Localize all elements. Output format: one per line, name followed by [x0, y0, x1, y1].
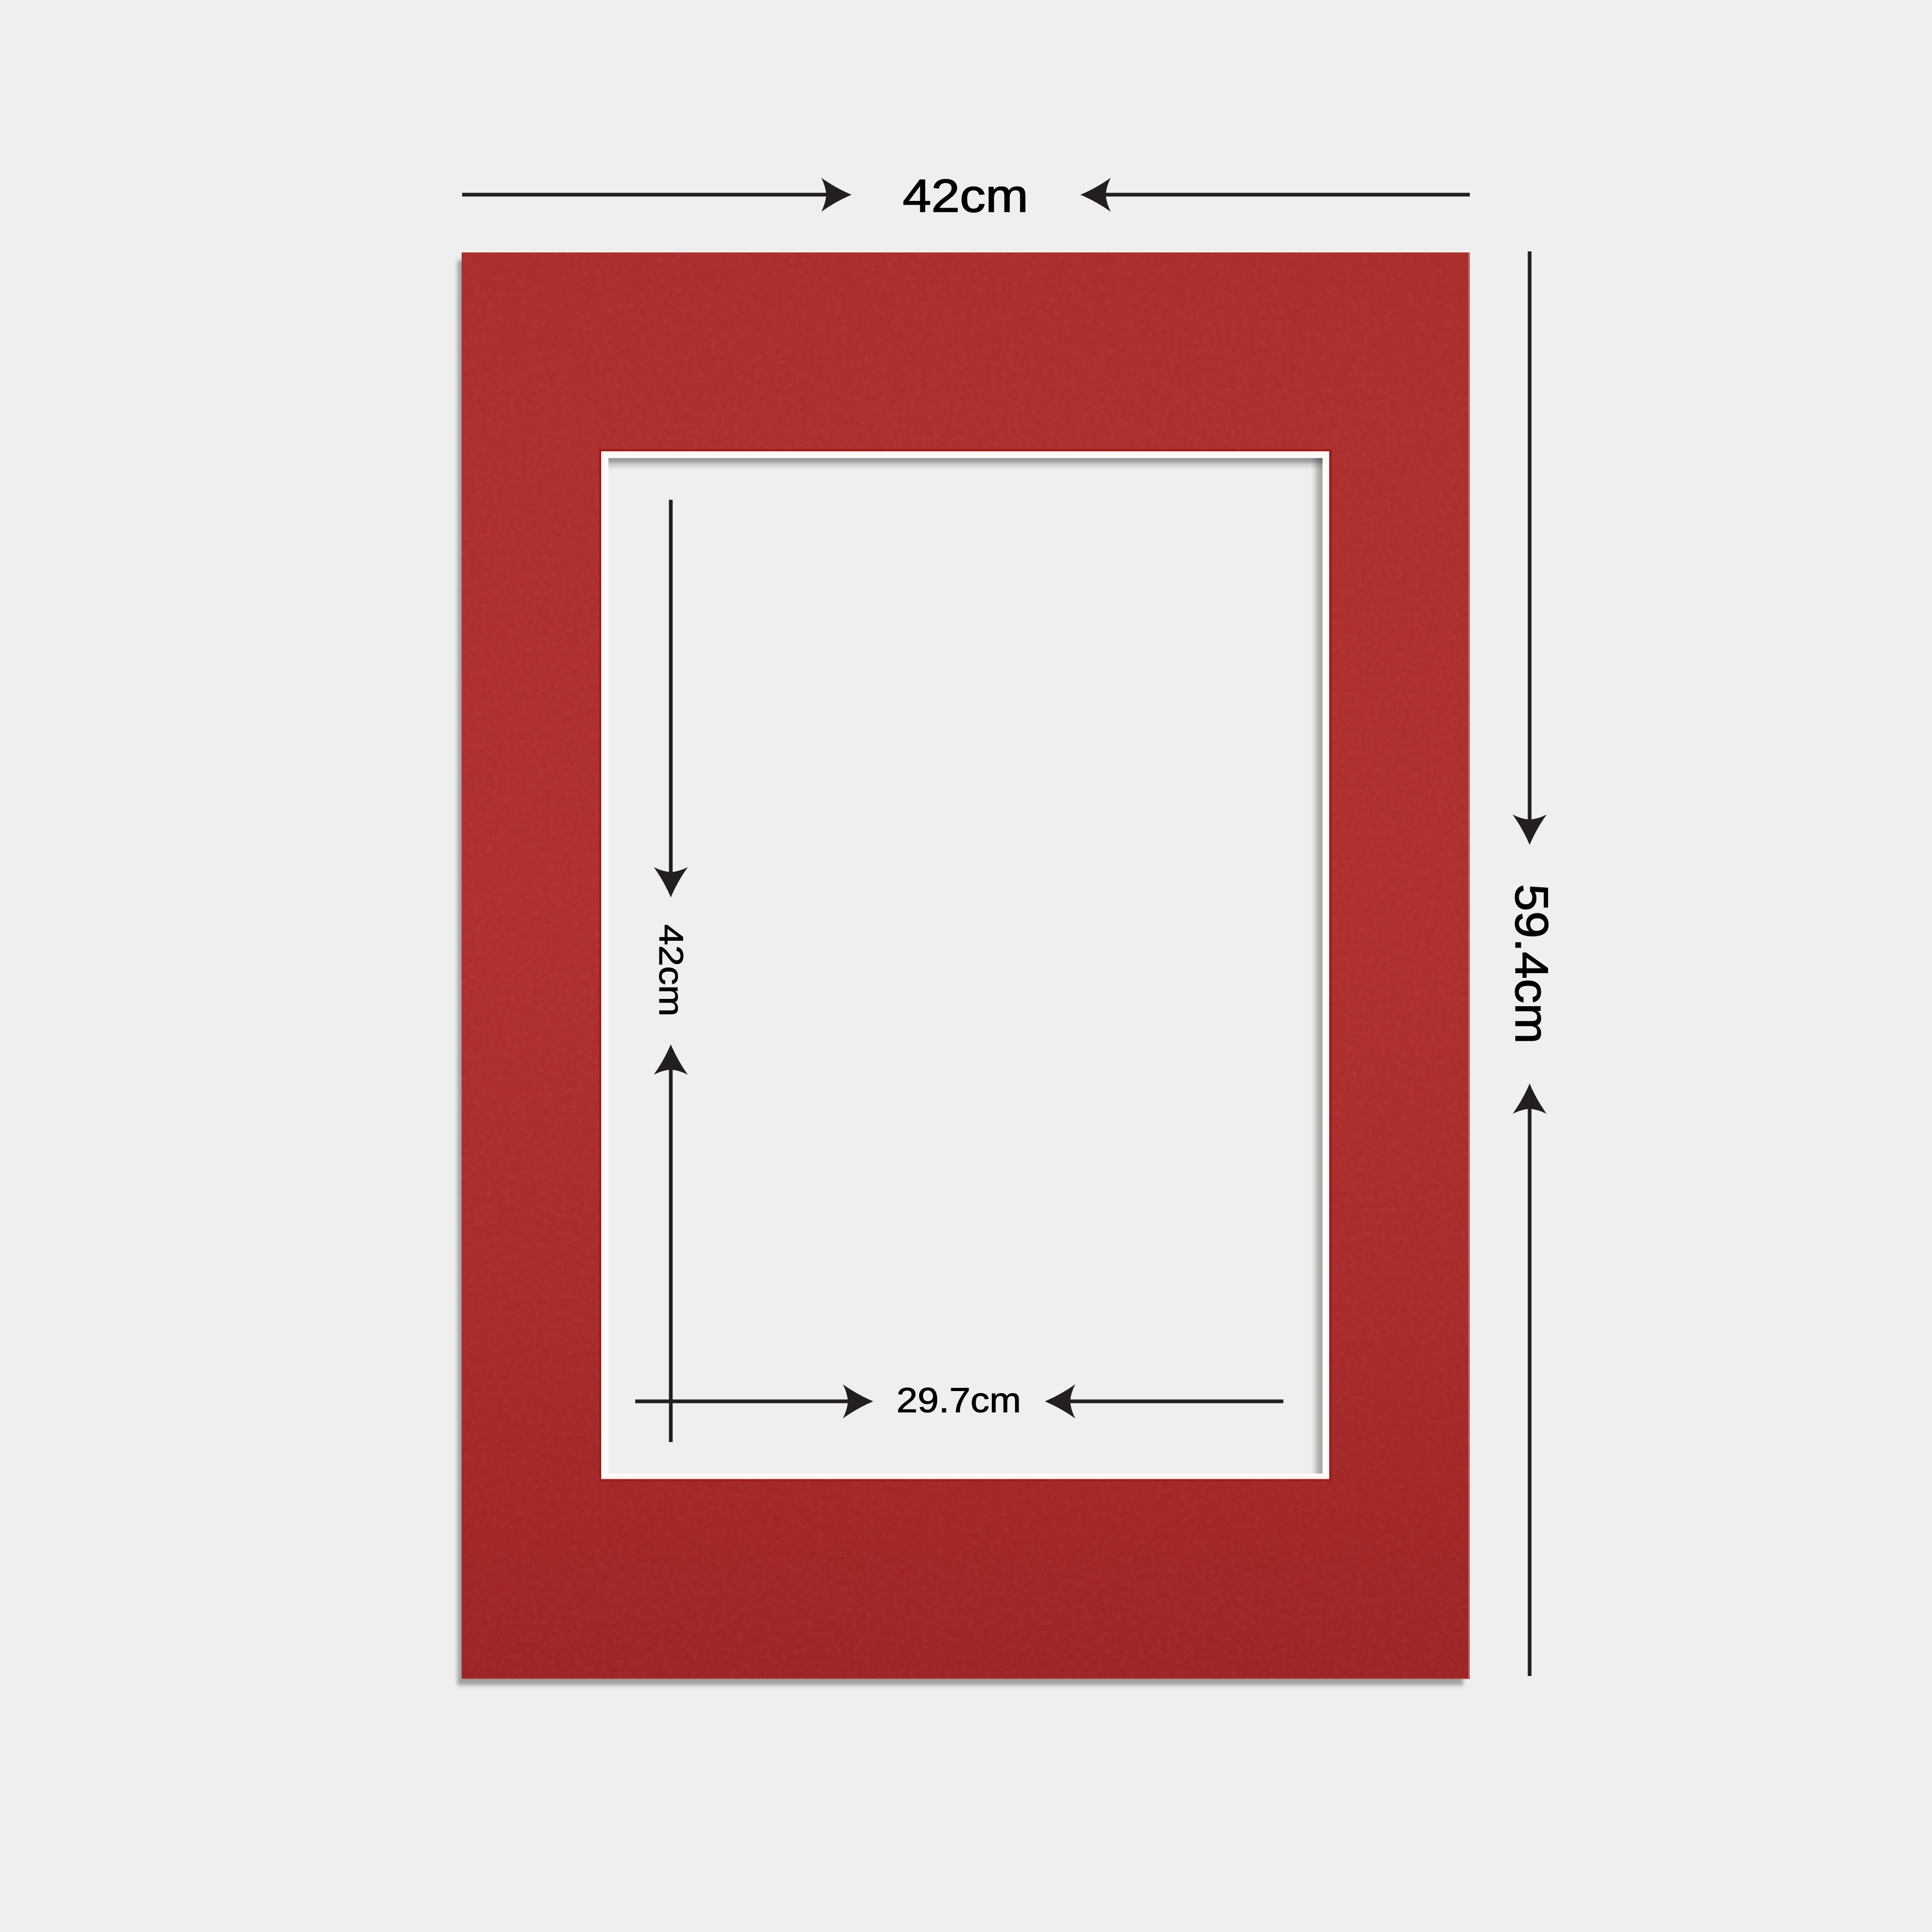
mat bottom edge highlight	[462, 1678, 1470, 1679]
opening interior	[608, 458, 1323, 1473]
arrow: inner width left	[635, 1384, 873, 1418]
arrow: inner width right	[1045, 1384, 1283, 1418]
mat surface	[462, 252, 1470, 1679]
opening white bevel	[601, 451, 1329, 1479]
panel: red mat board	[457, 252, 1470, 1685]
opening bevel lower edge	[601, 1478, 1329, 1479]
opening right inner shadow	[1310, 458, 1323, 1473]
opening top inner shadow	[608, 458, 1323, 470]
mat light paper grain	[462, 252, 1470, 1679]
mat right edge highlight	[1468, 252, 1470, 1679]
label: outer height 59.4cm: 59.4cm	[1505, 884, 1557, 1044]
arrow: top width left	[462, 178, 852, 212]
arrow: inner height upper	[654, 500, 688, 897]
mat dark paper grain	[462, 252, 1470, 1679]
arrow: outer height upper	[1513, 251, 1547, 845]
opening dark red cut line	[599, 449, 1332, 1481]
mat drop shadow	[457, 260, 1463, 1685]
panel: window opening	[599, 449, 1332, 1481]
label: inner height 42cm: 42cm	[652, 924, 690, 1016]
arrow: inner height lower	[654, 1044, 688, 1442]
label: top width 42cm: 42cm	[903, 171, 1028, 222]
arrow: outer height lower	[1513, 1083, 1547, 1676]
label: inner width 29.7cm: 29.7cm	[896, 1381, 1021, 1420]
arrow: top width right	[1080, 178, 1470, 212]
